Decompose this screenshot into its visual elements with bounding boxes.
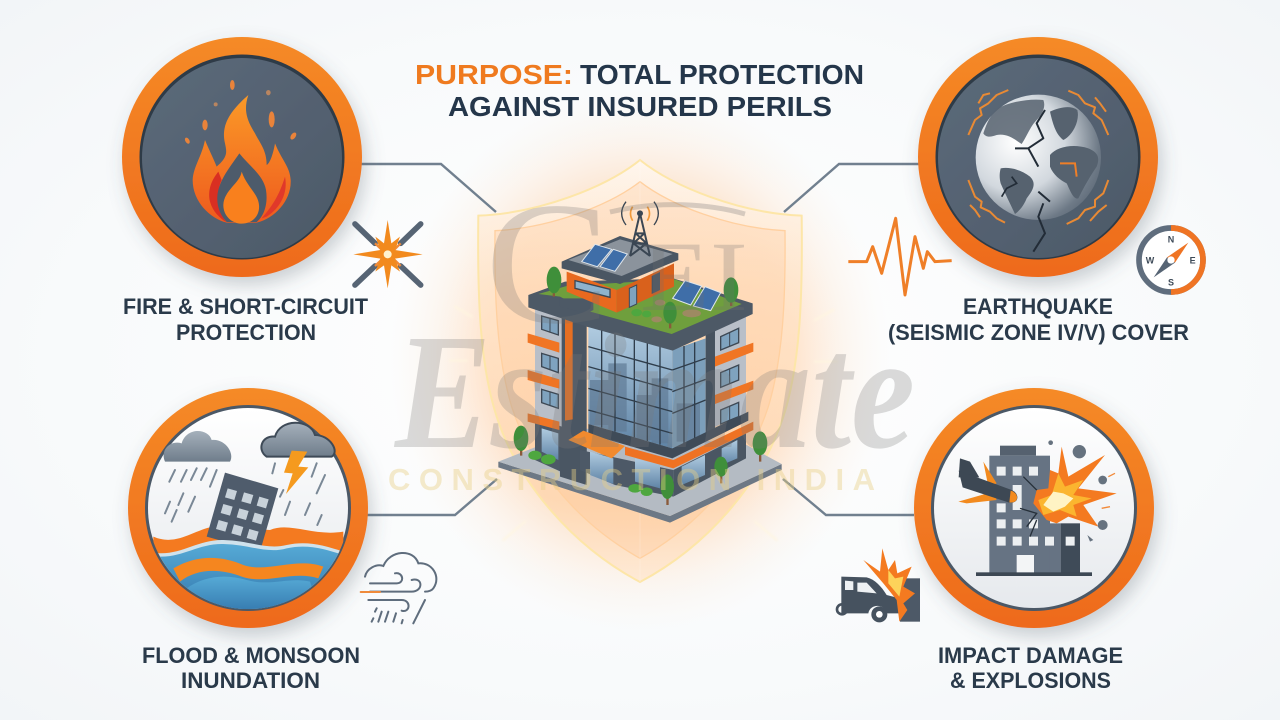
icon: building with plane and explosion (958, 440, 1117, 576)
panel: impact (837, 388, 1154, 693)
watermark: Estimate (393, 300, 915, 483)
connector lines (360, 164, 919, 515)
watermark: C (485, 166, 610, 360)
building (498, 202, 782, 523)
label: impact: IMPACT DAMAGE (938, 643, 1123, 668)
icon: seismograph (848, 218, 952, 295)
watermark (388, 166, 915, 497)
badge: earthquake (918, 37, 1158, 277)
label: fire: PROTECTION (176, 320, 316, 345)
title: TOTAL PROTECTION (580, 59, 864, 90)
icon: wind and rain cloud (361, 553, 436, 623)
icon: short circuit (353, 220, 423, 288)
right wall (706, 317, 753, 435)
label: impact (938, 643, 1123, 693)
label: flood: INUNDATION (181, 668, 320, 693)
icon: compass: S (1168, 277, 1174, 287)
icon: cracked globe (968, 90, 1108, 252)
glass facade (588, 327, 706, 448)
label: earthquake (888, 294, 1189, 345)
orange band and canopy (568, 412, 753, 468)
lower floor (535, 303, 746, 497)
antenna (622, 202, 658, 256)
badge: impact (914, 388, 1154, 628)
icon: compass (1139, 228, 1203, 292)
penthouse (562, 236, 678, 313)
label: fire: FIRE & SHORT-CIRCUIT (123, 294, 369, 319)
icon: compass: E (1190, 256, 1196, 266)
label: earthquake: (SEISMIC ZONE IV/V) COVER (888, 320, 1189, 345)
panel: flood (128, 388, 436, 693)
central shield and building (450, 160, 837, 582)
label: flood: FLOOD & MONSOON (142, 643, 360, 668)
panel: fire (122, 37, 423, 345)
title (415, 59, 864, 122)
label: impact: & EXPLOSIONS (950, 668, 1111, 693)
watermark: EI (640, 221, 748, 332)
icon: compass: N (1168, 235, 1174, 245)
badge: fire (122, 37, 362, 277)
panel: earthquake (848, 37, 1203, 345)
roof (528, 278, 753, 351)
glow behind shield (390, 90, 890, 630)
icon: flooded building (153, 423, 343, 620)
left wall (528, 307, 573, 430)
label: earthquake: EARTHQUAKE (963, 294, 1113, 319)
trees (514, 267, 767, 505)
label: fire (123, 294, 369, 345)
badge: flood (128, 388, 368, 628)
icon: flame (184, 80, 298, 224)
watermark: CONSTRUCTION INDIA (388, 462, 875, 497)
shield (450, 160, 837, 582)
icon: compass: W (1146, 256, 1155, 266)
base plate (498, 428, 782, 523)
title: PURPOSE: (415, 59, 573, 90)
icon: car crash (837, 548, 920, 622)
solar panels (582, 244, 721, 311)
title: AGAINST INSURED PERILS (448, 91, 832, 122)
label: flood (142, 643, 360, 693)
